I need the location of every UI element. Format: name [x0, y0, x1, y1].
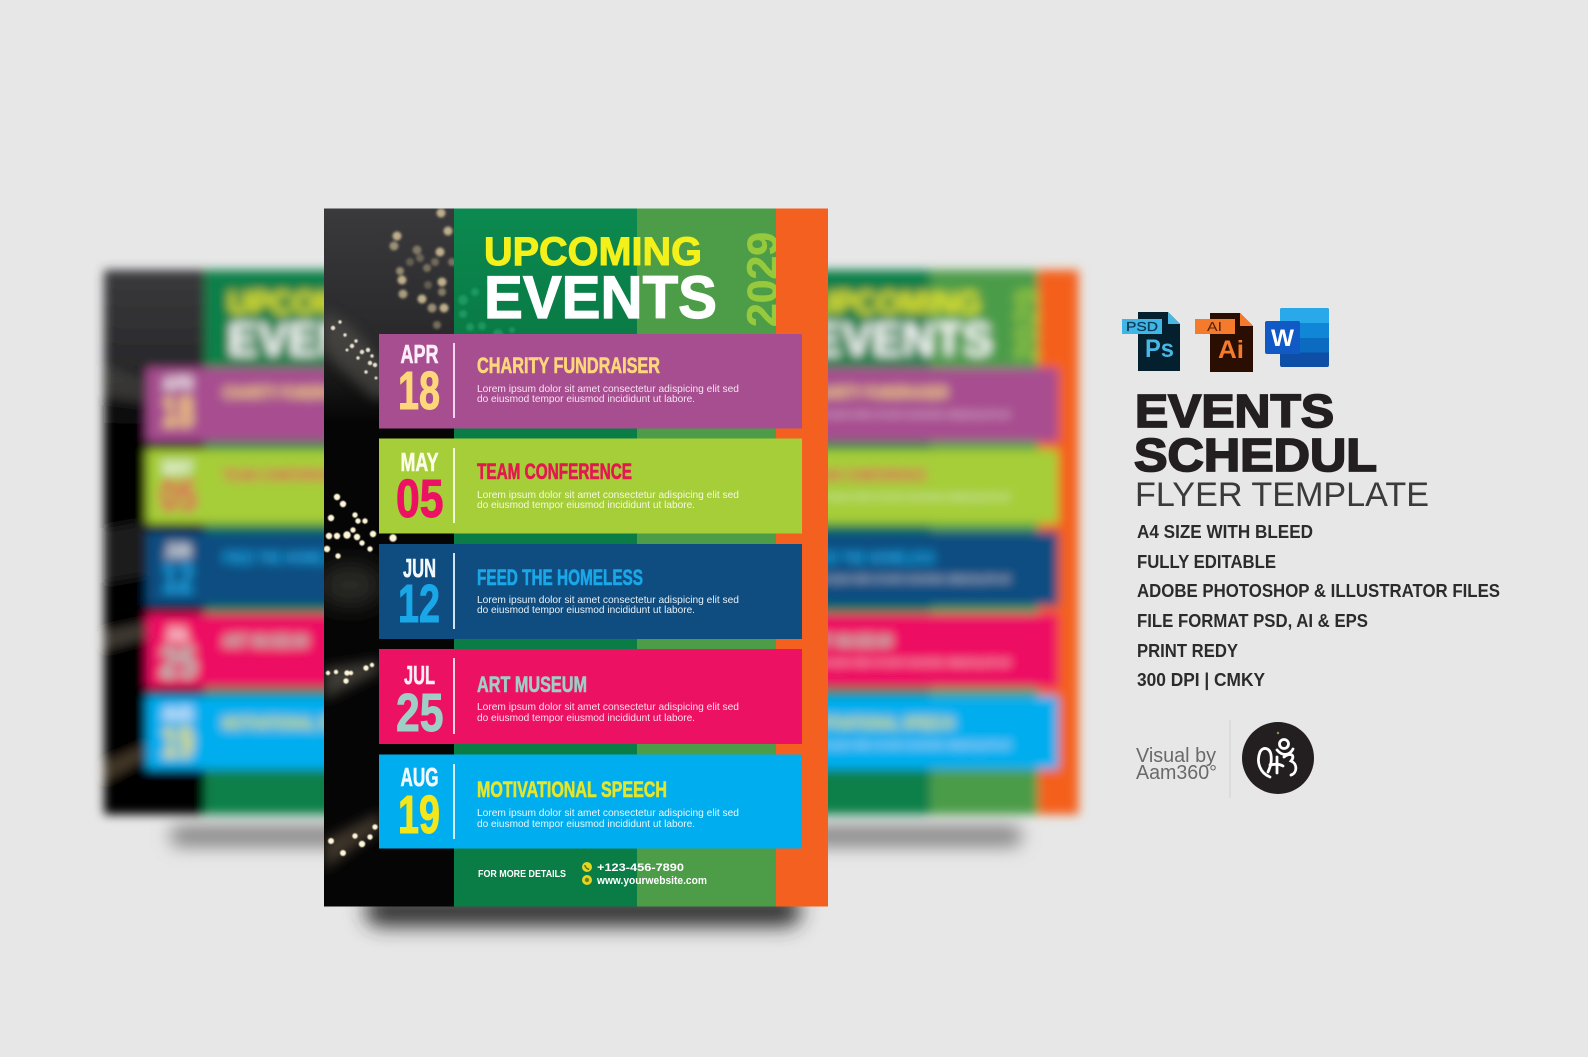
back flyer: right, blurred: Lorem ipsum dolor sit amet consectetur adispicing elit sed	[807, 409, 1010, 419]
back flyer: left, blurred: JUL	[166, 624, 190, 646]
back flyer: left, blurred: FEED THE HOMELESS	[223, 548, 351, 568]
credit: Visual by Aam360: Visual by	[1136, 745, 1216, 767]
back flyer: left, blurred: TEAM CONFERENCE	[223, 465, 343, 485]
back flyer: left, blurred: MOTIVATIONAL SPEECH	[223, 713, 370, 733]
feature list: 300 DPI | CMKY	[1137, 670, 1265, 690]
event card: Motivational Speech: Lorem ipsum dolor sit amet consectetur adispicing elit sed	[477, 807, 739, 819]
feature list: ADOBE PHOTOSHOP & ILLUSTRATOR FILES	[1137, 581, 1500, 601]
credit: Visual by Aam360: Aam360°	[1136, 762, 1217, 784]
back flyer: left, blurred: 19	[161, 719, 194, 767]
back flyer: right, blurred: Lorem ipsum dolor sit amet consectetur adispicing elit sed	[807, 740, 1010, 750]
back flyer: right, blurred: UPCOMING	[812, 285, 981, 321]
icon: PSD file: Ps	[1145, 335, 1174, 363]
event card: Motivational Speech: MOTIVATIONAL SPEECH	[477, 777, 667, 802]
event card: Motivational Speech: do eiusmod tempor eiusmod incididunt ut labore.	[477, 818, 695, 830]
credit divider	[1230, 720, 1231, 798]
flyer background photo: black fabric with gold bokeh	[316, 208, 456, 906]
back flyer: left, blurred: 05	[160, 473, 197, 521]
feature list: FILE FORMAT PSD, AI & EPS	[1137, 611, 1368, 631]
back flyer: left, blurred: APR	[163, 373, 193, 396]
heading: SCHEDUL: SCHEDUL	[1134, 429, 1377, 481]
icon: AI file: AI	[1207, 319, 1222, 334]
title: EVENTS: EVENTS	[484, 264, 717, 331]
soft gold bokeh dots	[390, 208, 456, 329]
event card: Feed the Homeless: JUN	[403, 555, 436, 583]
event card: Charity Fundraiser: do eiusmod tempor eiusmod incididunt ut labore.	[477, 393, 695, 405]
back flyer: right, blurred: MOTIVATIONAL SPEECH	[807, 713, 954, 733]
back flyer: left, blurred	[104, 270, 495, 814]
blurred shadow: back flyers	[170, 826, 1022, 846]
back flyer: right, blurred: FEED THE HOMELESS	[807, 548, 935, 568]
panel: main flyer	[316, 208, 828, 906]
back flyer: left, blurred: MAY	[163, 458, 193, 480]
back flyer: left, blurred: 18	[161, 388, 194, 436]
event card: Team Conference: 05	[396, 469, 444, 529]
back flyer: right, blurred	[731, 270, 1079, 814]
back flyer: left, blurred: ART MUSEUM	[223, 631, 308, 651]
event card: Feed the Homeless: do eiusmod tempor eiusmod incididunt ut labore.	[477, 604, 695, 616]
event card: Motivational Speech: AUG	[400, 764, 438, 792]
shadow under main flyer	[365, 896, 801, 926]
event card: Charity Fundraiser: 18	[398, 361, 440, 421]
green bokeh texture	[458, 288, 516, 334]
event card: Motivational Speech: 19	[398, 785, 440, 845]
feature list: A4 SIZE WITH BLEED	[1137, 522, 1313, 542]
feature list: PRINT REDY	[1137, 641, 1238, 661]
event card: Charity Fundraiser: CHARITY FUNDRAISER	[477, 353, 660, 378]
back flyer: right, blurred: Lorem ipsum dolor sit amet consectetur adispicing elit sed	[807, 492, 1010, 502]
icon: PSD file	[1122, 312, 1180, 371]
feature list	[1137, 522, 1500, 690]
event card: Charity Fundraiser: Lorem ipsum dolor sit amet consectetur adispicing elit sed	[477, 383, 739, 395]
event card: Feed the Homeless: FEED THE HOMELESS	[477, 565, 643, 590]
sparkle band	[331, 320, 378, 380]
icon: PSD file: PSD	[1126, 319, 1158, 334]
event card: Feed the Homeless: 12	[398, 574, 440, 634]
back flyer: left, blurred: UPCOMING	[228, 285, 397, 321]
event card: Team Conference	[379, 438, 802, 534]
credit: Visual by Aam360	[1136, 745, 1217, 784]
event card: Charity Fundraiser: APR	[400, 341, 438, 369]
back flyer: left, blurred: EVENTS	[228, 313, 409, 365]
event card: Feed the Homeless	[379, 544, 802, 639]
event card: Art Museum	[379, 649, 802, 744]
icon: Word file	[1265, 308, 1329, 367]
back flyer: left, blurred: 25	[160, 639, 197, 688]
event card: Art Museum: do eiusmod tempor eiusmod incididunt ut labore.	[477, 712, 695, 724]
back flyer: right, blurred: CHARITY FUNDRAISER	[807, 382, 948, 402]
icon: Word file: W	[1271, 325, 1294, 352]
icon: Aam360 logo	[1242, 722, 1314, 794]
year 2029, vertical: 2029	[739, 232, 787, 327]
back flyer: right, blurred: ART MUSEUM	[807, 631, 892, 651]
flyer footer: contact details	[478, 862, 707, 887]
icon: AI file	[1195, 313, 1253, 372]
back flyer: left, blurred: JUN	[165, 540, 191, 562]
event card: Art Museum: JUL	[404, 662, 435, 690]
title: UPCOMING: UPCOMING	[484, 230, 702, 274]
event card: Team Conference: do eiusmod tempor eiusmod incididunt ut labore.	[477, 499, 695, 511]
back flyer: right, blurred: Lorem ipsum dolor sit amet consectetur adispicing elit sed	[807, 574, 1010, 584]
heading: EVENTS: EVENTS	[1135, 385, 1334, 437]
event card: Team Conference: Lorem ipsum dolor sit amet consectetur adispicing elit sed	[477, 489, 739, 501]
flyer colour columns	[454, 208, 828, 906]
back flyer: right, blurred: Lorem ipsum dolor sit amet consectetur adispicing elit sed	[807, 657, 1010, 667]
event card: Team Conference: TEAM CONFERENCE	[477, 459, 632, 484]
event card: Motivational Speech	[379, 754, 802, 848]
flyer footer: contact details: +123-456-7890	[597, 862, 684, 874]
back flyer: right, blurred: EVENTS	[812, 313, 993, 365]
event card: Feed the Homeless: Lorem ipsum dolor sit amet consectetur adispicing elit sed	[477, 594, 739, 606]
event card: Charity Fundraiser	[379, 334, 802, 428]
back flyer: left, blurred: CHARITY FUNDRAISER	[223, 382, 364, 402]
feature list: FULLY EDITABLE	[1137, 552, 1276, 572]
subheading: FLYER TEMPLATE: FLYER TEMPLATE	[1135, 476, 1429, 514]
event card: Art Museum: 25	[396, 683, 444, 743]
back flyer: right, blurred: 2029	[1008, 288, 1046, 362]
bright bokeh clusters	[324, 494, 397, 856]
icon: AI file: Ai	[1218, 336, 1244, 364]
flyer footer: contact details: www.yourwebsite.com	[596, 875, 707, 887]
event card: Art Museum: Lorem ipsum dolor sit amet consectetur adispicing elit sed	[477, 701, 739, 713]
event card: Team Conference: MAY	[400, 449, 438, 477]
flyer footer: contact details: FOR MORE DETAILS	[478, 868, 566, 880]
event card: Art Museum: ART MUSEUM	[477, 672, 587, 697]
back flyer: left, blurred: 12	[161, 554, 194, 603]
back flyer: right, blurred: TEAM CONFERENCE	[807, 465, 927, 485]
back flyer: left, blurred: AUG	[163, 703, 193, 725]
